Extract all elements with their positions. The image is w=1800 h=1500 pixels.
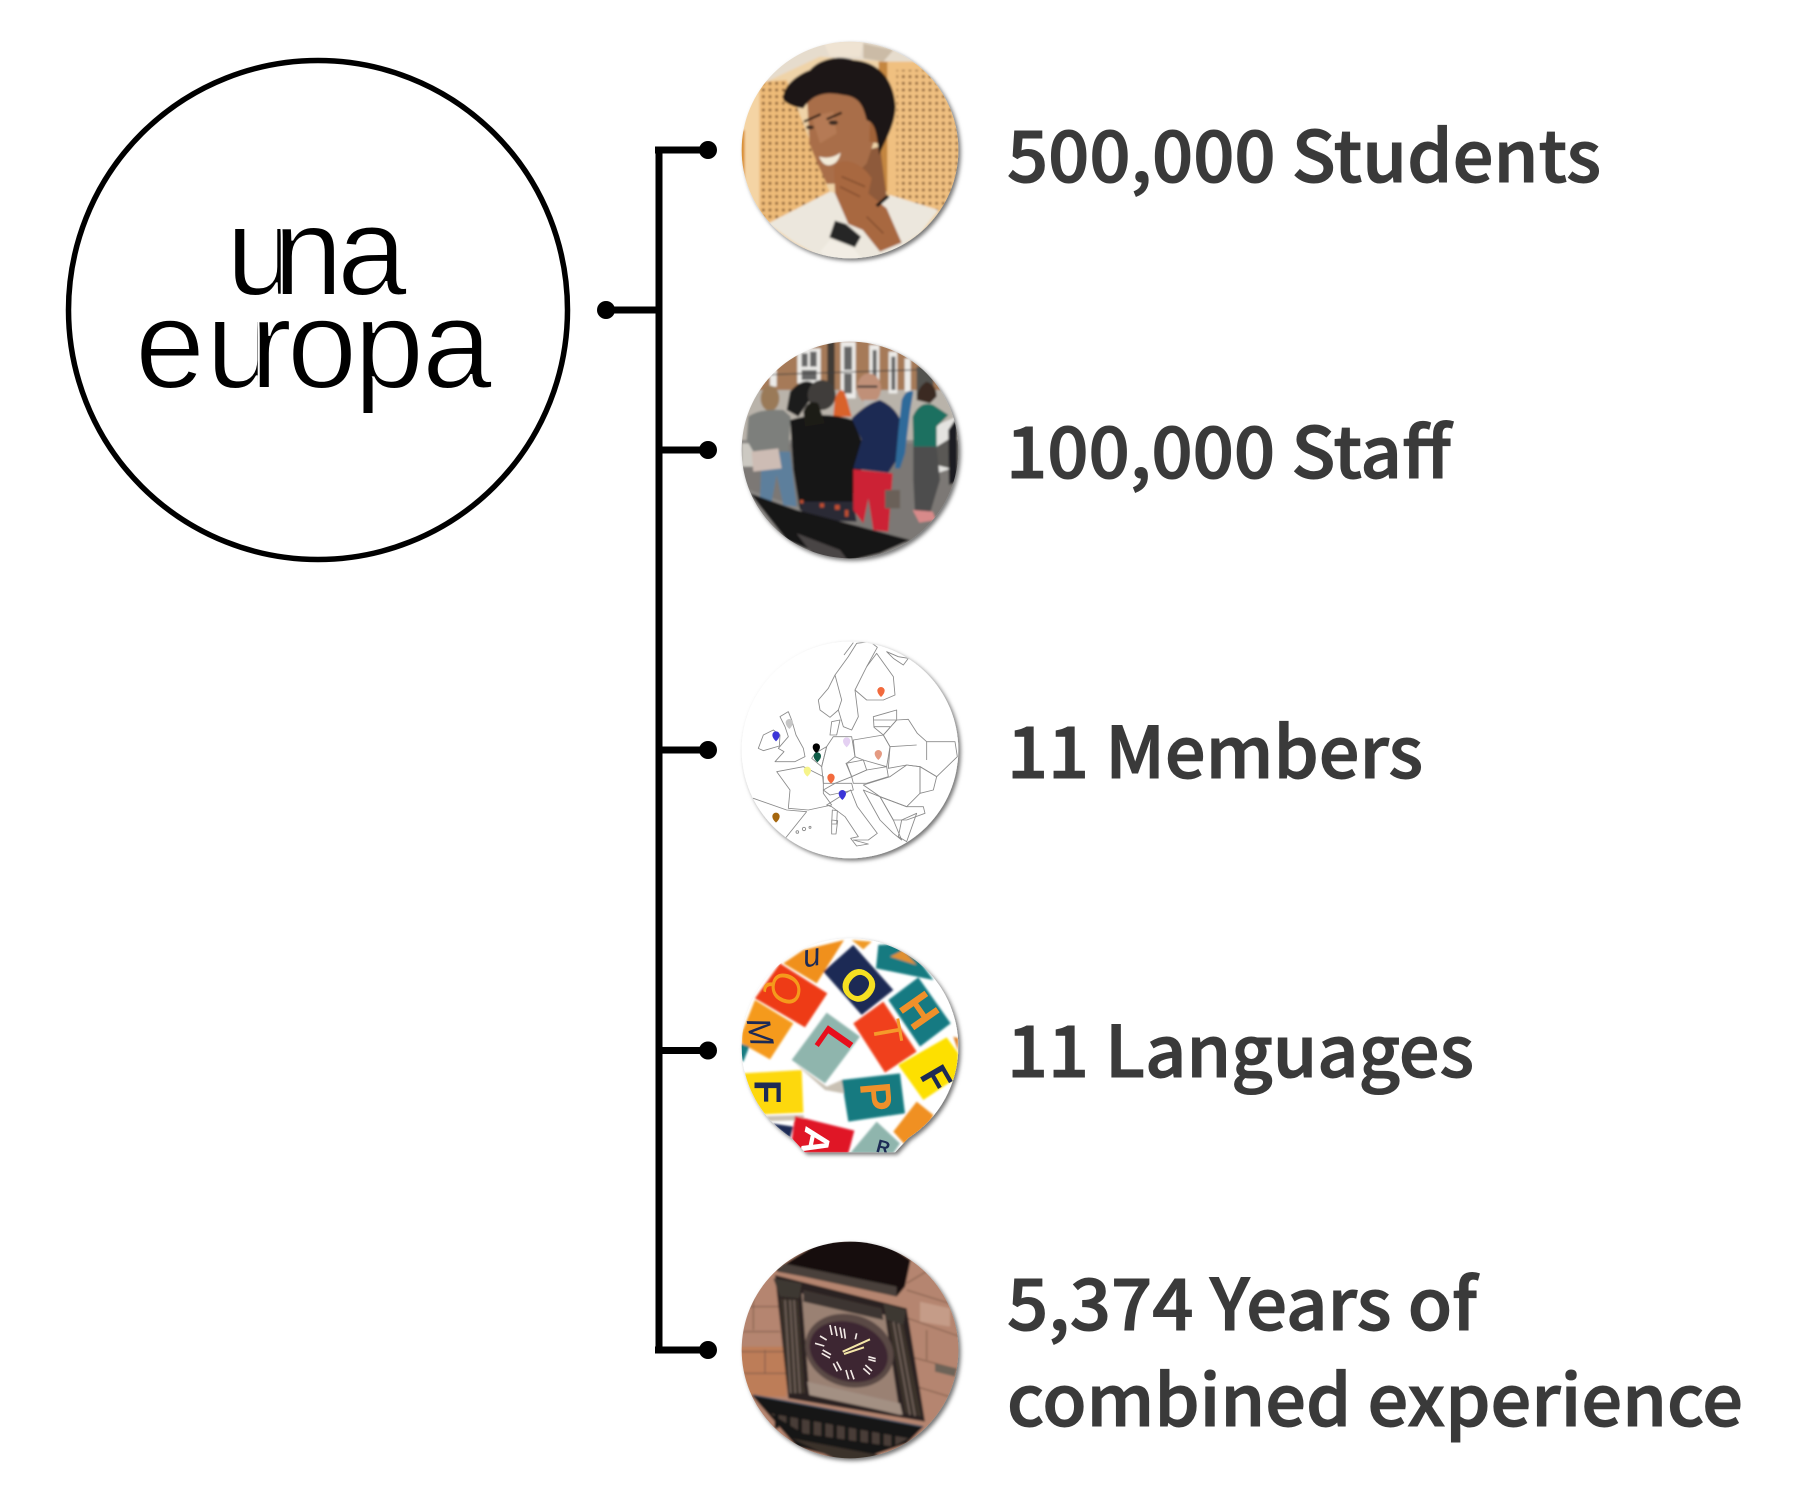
photo: clock tower xyxy=(737,1237,963,1463)
label: members: 11 Members xyxy=(1007,697,1423,799)
tile letters: H xyxy=(889,982,950,1038)
tile letters: L xyxy=(806,1017,863,1069)
label: years of combined experience: 5,374 Years of xyxy=(1007,1249,1479,1351)
photo: smiling student xyxy=(737,37,963,263)
country outlines xyxy=(753,642,958,846)
tile letters: F xyxy=(746,1080,789,1103)
tile letters xyxy=(739,936,960,1159)
tile letters: Q xyxy=(760,968,812,1008)
label: languages: 11 Languages xyxy=(1007,996,1474,1098)
label: years of combined experience xyxy=(1007,1249,1743,1447)
clock numerals xyxy=(815,1325,876,1379)
location pins xyxy=(772,687,885,823)
logo wordmark line 2: europa xyxy=(135,274,493,415)
connector tree xyxy=(597,141,717,1359)
map: Europe with member pins xyxy=(740,642,958,860)
logo wordmark line 1: una xyxy=(226,181,408,322)
logo: una europa circle xyxy=(68,60,568,560)
label: students: 500,000 Students xyxy=(1007,101,1601,203)
clock hands xyxy=(843,1339,870,1354)
tile letters: R xyxy=(874,1135,892,1159)
tile letters: A xyxy=(791,1123,839,1159)
tile letters: u xyxy=(800,936,823,974)
photo: staff gathering xyxy=(737,337,963,563)
label: staff: 100,000 Staff xyxy=(1006,397,1454,499)
tile letters: T xyxy=(863,1016,911,1048)
tile letters: M xyxy=(739,1015,780,1049)
tile letters: F xyxy=(911,1058,960,1100)
tile letters: P xyxy=(850,1080,900,1113)
photo: letter tiles xyxy=(737,936,963,1159)
tile letters: O xyxy=(829,955,889,1016)
label: years of combined experience: combined experience xyxy=(1007,1345,1743,1447)
